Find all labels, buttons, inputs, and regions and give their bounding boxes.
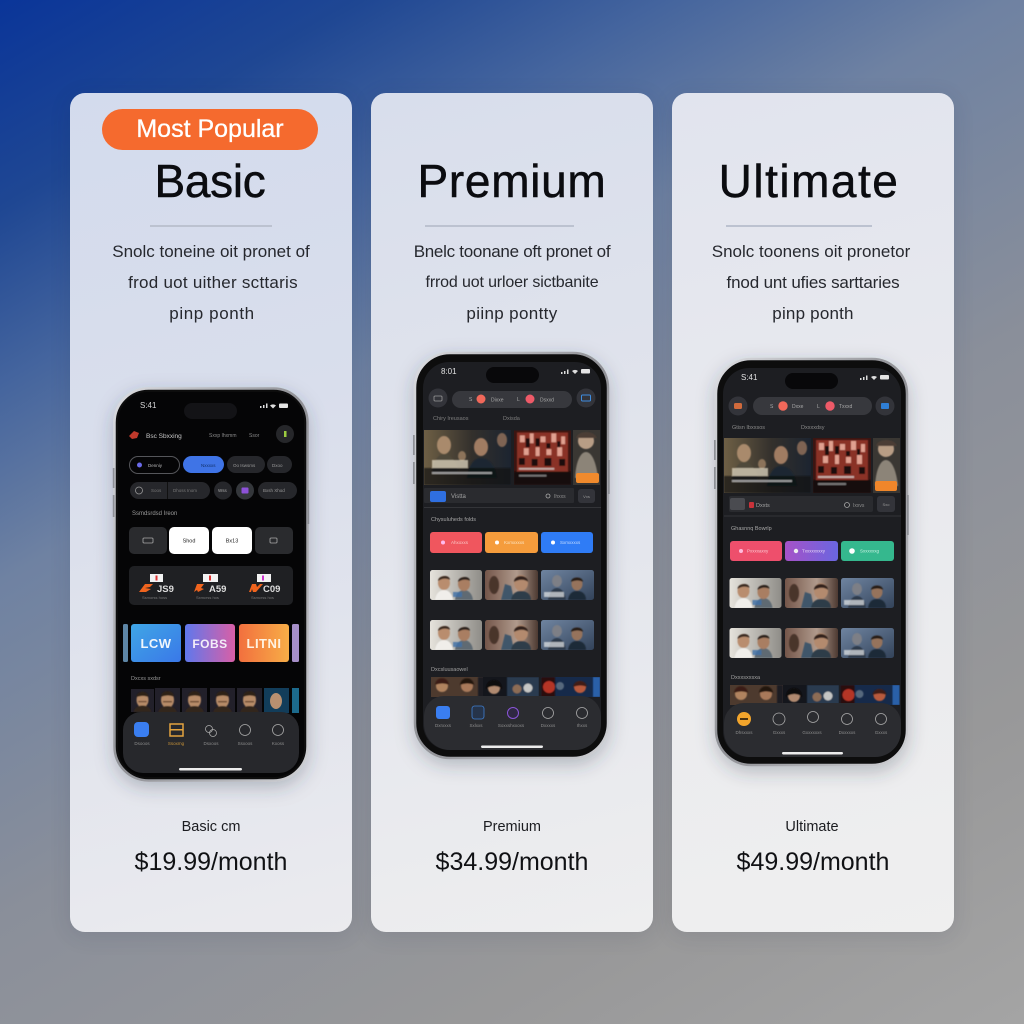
- description text: Bnelc toonane oft pronet of: [414, 242, 610, 261]
- bottom navigation: Ssxoos: [238, 741, 253, 746]
- divider rule: [150, 225, 272, 227]
- filter chips row 2: [130, 482, 297, 500]
- bottom navigation: Gxxxs: [875, 730, 888, 735]
- segmented tabs: Bx13: [226, 538, 238, 544]
- category buttons: Kxmxxxxs: [504, 540, 525, 545]
- logo panel: [129, 566, 293, 605]
- bottom navigation: Gxxxs: [773, 730, 786, 735]
- status bar: [140, 401, 288, 419]
- search header: S: [469, 397, 473, 403]
- category buttons: [730, 541, 894, 561]
- badge: Most Popular: [102, 109, 318, 150]
- search row: Ixxvs: [853, 503, 865, 509]
- category buttons: Ahxoxxs: [451, 540, 469, 545]
- divider rule: [425, 225, 574, 227]
- search header: [428, 388, 596, 408]
- bottom navigation: [724, 703, 901, 757]
- panel: Premium plan: [371, 93, 653, 932]
- panel: Ultimate plan: [672, 93, 954, 932]
- bottom navigation: [123, 712, 299, 773]
- search row: Dxxts: [756, 503, 770, 509]
- price: $49.99/month: [737, 848, 889, 876]
- description text: Snolc toonens oit pronetor: [712, 242, 910, 261]
- search header: Txxxd: [839, 404, 853, 410]
- status bar: [741, 373, 889, 389]
- description text: pinp ponth: [169, 304, 255, 323]
- search header: Dsxxd: [540, 398, 554, 404]
- bottom navigation: Dhsxxxs: [735, 730, 753, 735]
- filter chips row 1: Oo Iswsms: [233, 463, 256, 468]
- bottom navigation: Gxxxxxxs: [802, 730, 822, 735]
- search header: [728, 396, 894, 416]
- section label: Dxxxsxxsxa: [731, 675, 761, 681]
- search row: [729, 496, 895, 512]
- panel: Basic plan: [70, 93, 352, 932]
- heading: Basic: Basic: [154, 155, 266, 207]
- status bar: 8:01: [441, 367, 457, 376]
- search row: [424, 488, 595, 503]
- plan name: Ultimate: [785, 819, 839, 835]
- section label: Dxcsluusaowel: [431, 667, 468, 673]
- logo panel: Sxmcrss hos: [196, 595, 219, 600]
- filter chips row 1: Nxxxxs: [201, 463, 216, 468]
- section labels: Chiry Ireusaos: [433, 416, 469, 422]
- divider: [424, 507, 601, 508]
- price: $19.99/month: [135, 848, 287, 876]
- description text: pinp ponth: [772, 304, 854, 323]
- thumbnail row 2: [730, 628, 894, 658]
- phone body: [415, 353, 608, 758]
- search row: Sxo: [883, 502, 890, 507]
- section labels: [732, 425, 825, 431]
- section label: Ghasnnq Bowrlp: [731, 526, 772, 532]
- status bar: S:41: [741, 373, 758, 382]
- divider: [724, 516, 901, 517]
- logo panel: C09: [263, 584, 280, 595]
- logo panel: Ssmorss hoss: [142, 595, 167, 600]
- phone body: [716, 359, 907, 765]
- filter chips row 1: Denniy: [148, 463, 163, 468]
- category buttons: [430, 532, 593, 553]
- category buttons: Pxxxxaxxy: [747, 548, 769, 554]
- search header: L: [817, 404, 820, 410]
- bottom navigation: Ssoxmg: [168, 741, 185, 746]
- status bar: [441, 367, 590, 383]
- description text: [712, 242, 910, 323]
- category buttons: Sxmxxxxs: [560, 540, 581, 545]
- section label: Chysuluheds folds: [431, 517, 476, 523]
- description text: frod uot uither scttaris: [128, 273, 298, 292]
- description text: piinp pontty: [466, 304, 558, 323]
- filter chips row 1: [130, 456, 292, 474]
- filter chips row 1: Dxoo: [272, 463, 283, 468]
- plan name: Premium: [483, 819, 541, 835]
- description text: Snolc toneine oit pronet of: [112, 242, 310, 261]
- gradient genre tiles: LCW: [140, 636, 172, 651]
- divider rule: [726, 225, 872, 227]
- gradient genre tiles: [123, 624, 299, 662]
- search row: Vistta: [451, 494, 467, 500]
- bottom navigation: Dsooos: [134, 741, 150, 746]
- filter chips row 2: Wss: [218, 488, 227, 493]
- section labels: Gtisn Ibxxsos: [732, 425, 765, 431]
- search row: Ihxxs: [554, 494, 566, 500]
- bottom navigation: Dsxoos: [203, 741, 219, 746]
- plan name: Basic cm: [182, 819, 240, 835]
- filter chips row 2: Bxsh Xhod: [263, 488, 285, 493]
- section label: Dxcxs sxdsr: [131, 676, 161, 682]
- category buttons: Sxxxxxxg: [860, 548, 880, 554]
- search header: Dixxe: [491, 398, 504, 404]
- heading: Ultimate: Ultimate: [719, 155, 899, 207]
- bottom navigation: Dxxxxs: [541, 723, 556, 728]
- poster strip: [730, 685, 900, 705]
- search header: Dxxe: [792, 404, 804, 410]
- section label: Ssmdsrdsd Ireon: [132, 511, 177, 517]
- thumbnail row 2: [430, 620, 594, 650]
- badge: Most Popular: Most Popular: [136, 115, 284, 143]
- logo panel: Ssmcrss hos: [251, 595, 274, 600]
- section labels: [433, 416, 521, 422]
- phone body: [114, 388, 308, 780]
- description text: frrod uot urloer sictbanite: [426, 274, 598, 291]
- filter chips row 2: Soos: [151, 488, 162, 493]
- gradient genre tiles: LITNI: [246, 636, 282, 651]
- bottom navigation: Soxxshxxoxs: [498, 723, 525, 728]
- bottom navigation: [424, 696, 601, 750]
- filter chips row 2: Dhoss Inom: [173, 488, 197, 493]
- portrait row: [131, 688, 299, 713]
- featured posters: [424, 430, 600, 485]
- poster strip: [431, 677, 600, 697]
- bottom navigation: Sxlxxs: [469, 723, 483, 728]
- bottom navigation: Ihxxs: [577, 723, 588, 728]
- search header: S: [770, 404, 774, 410]
- app header: Sxxp Ihxmm: [209, 433, 237, 439]
- thumbnail row 1: [730, 578, 894, 608]
- description text: [414, 242, 611, 323]
- segmented tabs: [129, 527, 293, 554]
- description text: [112, 242, 310, 323]
- status bar: S:41: [140, 401, 157, 410]
- price: $34.99/month: [436, 848, 588, 876]
- gradient genre tiles: FOBS: [192, 637, 228, 651]
- phone: Premium: [413, 353, 610, 758]
- category buttons: Txxxxxxxxy: [802, 548, 826, 554]
- heading: Premium: Premium: [418, 155, 606, 207]
- phone: Ultimate: [714, 359, 909, 765]
- app header: Ssor: [249, 433, 260, 439]
- logo panel: JS9: [157, 584, 174, 595]
- phone: Basic: [113, 388, 309, 780]
- logo panel: A59: [209, 584, 226, 595]
- featured posters: [724, 438, 900, 493]
- bottom navigation: Kxoss: [272, 741, 285, 746]
- app header: [129, 425, 294, 443]
- thumbnail row 1: [430, 570, 594, 600]
- search header: L: [517, 397, 520, 403]
- segmented tabs: Shod: [183, 538, 195, 544]
- bottom navigation: Dxxxxxs: [839, 730, 856, 735]
- app header: Bsc Sbxxing: [146, 433, 182, 440]
- section labels: Dxisda: [503, 416, 521, 422]
- bottom navigation: Dxrxxxs: [435, 723, 452, 728]
- section labels: Dxxxxdsy: [801, 425, 825, 431]
- search row: Vxs: [583, 494, 590, 499]
- description text: fnod unt ufies sarttaries: [727, 273, 899, 292]
